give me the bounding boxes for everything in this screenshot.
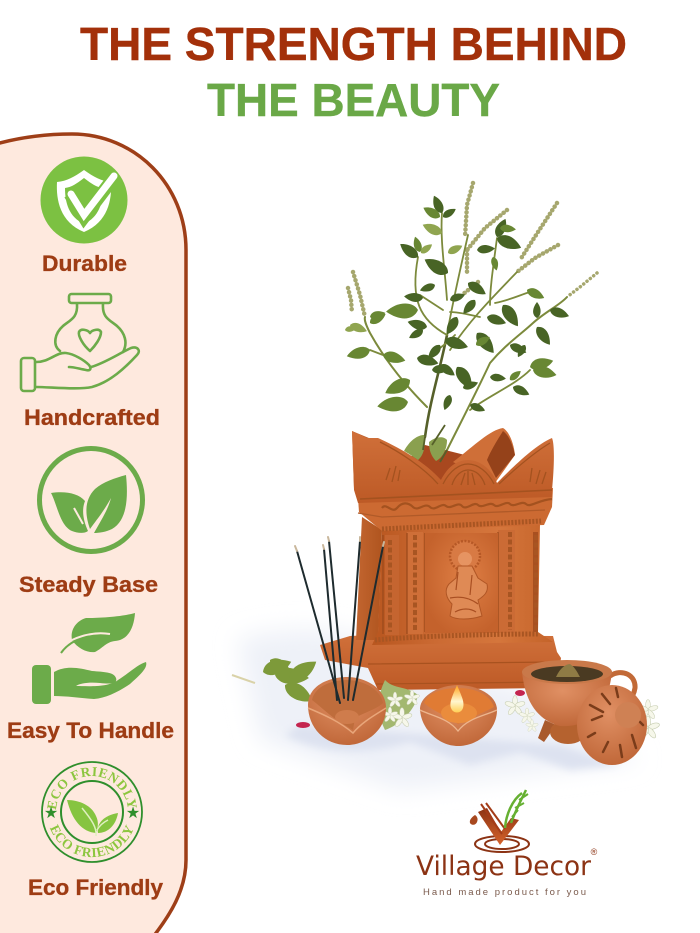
plinth band	[375, 634, 538, 640]
neck	[358, 488, 553, 531]
icon: eco friendly badge	[41, 761, 143, 863]
logo emblem	[470, 790, 529, 852]
leaves: dark	[397, 194, 571, 414]
icon: eco friendly badge: ★	[126, 803, 140, 822]
jasmine flowers	[382, 690, 660, 739]
icon: steady base leaves	[40, 448, 142, 552]
pot handle	[610, 673, 635, 703]
label: durable: Durable	[42, 251, 127, 276]
icon: eco friendly badge: ECO FRIENDLY	[47, 767, 137, 810]
title line 2: THE BEAUTY	[207, 74, 500, 126]
label: easy to handle: Easy To Handle	[7, 718, 174, 743]
pot body	[522, 672, 612, 726]
registered mark: ®	[591, 847, 598, 857]
tulsi planter	[320, 425, 561, 690]
pot legs	[538, 720, 556, 742]
title	[80, 18, 627, 126]
incense diya	[308, 677, 386, 745]
incense sticks	[295, 537, 384, 703]
pot back crown	[352, 431, 376, 488]
logo tagline: Hand made product for you	[423, 887, 586, 898]
icon: eco friendly badge: ECO FRIENDLY	[50, 824, 133, 858]
jasmine leaves	[379, 680, 418, 730]
flowers and leaves	[232, 655, 660, 739]
leaves: light	[344, 220, 464, 335]
stems	[365, 213, 567, 450]
logo: village decor	[416, 790, 598, 898]
relief deity	[446, 541, 487, 619]
body side	[356, 517, 382, 640]
crown ornaments	[358, 442, 552, 529]
basil sprig	[260, 655, 320, 707]
floor shadow	[238, 630, 640, 790]
title line 1: THE STRENGTH BEHIND	[80, 18, 627, 70]
petals	[296, 690, 525, 728]
icon: eco friendly badge: ★	[44, 803, 58, 822]
label: steady base: Steady Base	[19, 572, 158, 597]
base bands	[368, 662, 557, 684]
body front	[372, 524, 553, 645]
relief panel	[425, 533, 498, 633]
carved pillars	[383, 530, 538, 635]
inner soil	[395, 445, 490, 490]
panel: features	[0, 132, 188, 933]
dried stems left	[232, 675, 255, 683]
plant	[344, 183, 597, 450]
crown front	[352, 431, 554, 503]
back centre crown	[453, 428, 515, 483]
lid	[577, 685, 647, 765]
leaves: mid	[345, 204, 558, 414]
icon: easy to handle hand with leaf	[32, 613, 146, 704]
icon: durable shield	[40, 156, 128, 244]
pot lower leaves	[404, 425, 447, 462]
logo wordmark: Village Decor	[416, 851, 592, 882]
icon: handcrafted hand with pot	[21, 294, 139, 391]
lit diya	[420, 685, 497, 746]
flame	[450, 685, 464, 712]
panel background	[0, 134, 186, 933]
base	[320, 635, 561, 690]
flower spikes	[348, 183, 597, 317]
label: eco friendly: Eco Friendly	[28, 875, 163, 900]
label: handcrafted: Handcrafted	[24, 405, 160, 430]
product photo	[232, 183, 660, 790]
censer pot	[522, 660, 647, 765]
